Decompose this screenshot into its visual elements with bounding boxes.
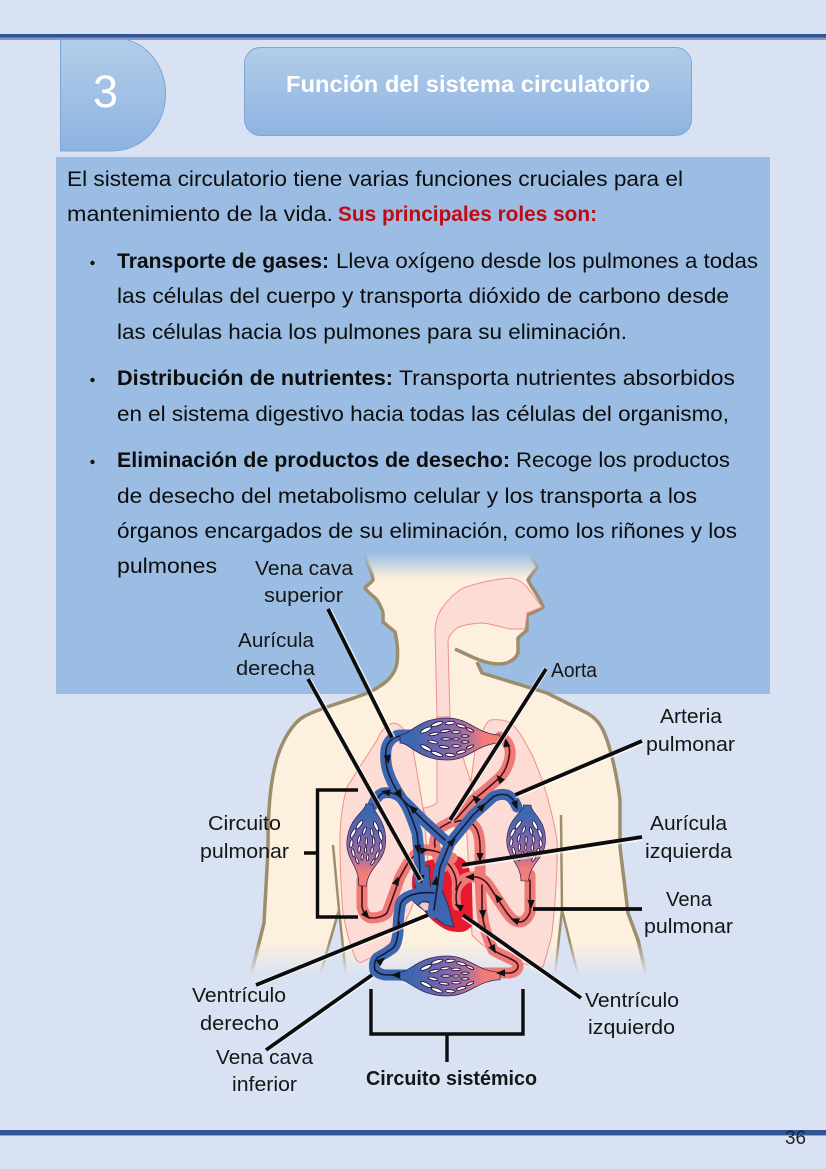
bullet: distribución de nutrientes: en el sistema digestivo hacia todas las células del organismo, bbox=[117, 402, 729, 426]
label: aurícula izquierda bbox=[645, 812, 733, 863]
bullet: eliminación de productos de desecho: Eliminación de productos de desecho: bbox=[117, 448, 510, 472]
leader lines halo bbox=[256, 610, 642, 1050]
title: Función del sistema circulatorio bbox=[286, 71, 650, 97]
label: aorta: Aorta bbox=[551, 659, 598, 682]
body silhouette bbox=[251, 553, 646, 975]
label: vena pulmonar: pulmonar bbox=[644, 915, 733, 938]
airway bbox=[435, 578, 542, 717]
bullet: transporte de gases: las células hacia los pulmones para su eliminación. bbox=[117, 320, 627, 344]
bullet: transporte de gases: Transporte de gases: bbox=[117, 249, 329, 273]
bracket: circuito sistémico bbox=[371, 989, 523, 1062]
label: circuito pulmonar bbox=[200, 812, 289, 863]
pulmonary and systemic vessels: blue bbox=[373, 735, 517, 975]
page number: 36 bbox=[785, 1128, 806, 1149]
label: arteria pulmonar: Arteria bbox=[660, 705, 723, 728]
intro text bbox=[67, 167, 683, 226]
bullet: eliminación de productos de desecho: pulmones bbox=[117, 554, 217, 578]
label: ventrículo derecho: derecho bbox=[200, 1012, 279, 1035]
bullet: transporte de gases: Lleva oxígeno desde los pulmones a todas bbox=[336, 249, 758, 273]
top rule bbox=[0, 34, 826, 40]
bullet: eliminación de productos de desecho: órganos encargados de su eliminación, como los riñones y los bbox=[117, 519, 737, 543]
label: vena cava inferior bbox=[216, 1046, 314, 1096]
label: aurícula derecha: Aurícula bbox=[238, 629, 315, 652]
heart chambers: blue bbox=[410, 866, 454, 927]
label: aurícula derecha bbox=[236, 629, 316, 680]
panel: text background bbox=[56, 157, 770, 694]
label: vena pulmonar bbox=[644, 888, 733, 938]
bullet: eliminación de productos de desecho: Recoge los productos bbox=[516, 448, 730, 472]
label: ventrículo izquierdo: Ventrículo bbox=[585, 989, 679, 1012]
label: aurícula derecha: derecha bbox=[236, 657, 316, 680]
label: circuito pulmonar: pulmonar bbox=[200, 840, 289, 863]
bottom rule bbox=[0, 1130, 826, 1136]
leader lines bbox=[256, 609, 642, 1050]
bullet: transporte de gases bbox=[90, 249, 758, 344]
label: circuito sistémico: Circuito sistémico bbox=[366, 1068, 537, 1090]
bullet: distribución de nutrientes: Transporta nutrientes absorbidos bbox=[399, 366, 735, 390]
bullet: eliminación de productos de desecho bbox=[90, 448, 737, 578]
intro text: El sistema circulatorio tiene varias funciones cruciales para el bbox=[67, 167, 683, 191]
intro text: Sus principales roles son: bbox=[338, 202, 597, 226]
bullet: eliminación de productos de desecho: de desecho del metabolismo celular y los transporta a los bbox=[117, 484, 697, 508]
label: arteria pulmonar bbox=[646, 705, 735, 756]
label: vena cava inferior: Vena cava bbox=[216, 1046, 314, 1069]
label: ventrículo derecho: Ventrículo bbox=[192, 984, 286, 1007]
label: vena pulmonar: Vena bbox=[666, 888, 713, 911]
pulmonary and systemic vessels: red bbox=[362, 737, 530, 973]
bracket: circuito pulmonar bbox=[304, 790, 358, 917]
label: ventrículo derecho bbox=[192, 984, 286, 1035]
label: arteria pulmonar: pulmonar bbox=[646, 733, 735, 756]
label: vena cava inferior: inferior bbox=[232, 1073, 297, 1096]
label: aurícula izquierda: izquierda bbox=[645, 840, 733, 863]
bullet: distribución de nutrientes bbox=[90, 366, 735, 426]
circulatory diagram bbox=[192, 553, 735, 1096]
title bbox=[244, 48, 692, 136]
label: ventrículo izquierdo bbox=[585, 989, 679, 1039]
section number badge: 3 bbox=[93, 66, 118, 117]
flow arrows bbox=[361, 737, 535, 979]
label: vena cava superior: Vena cava bbox=[255, 557, 354, 580]
label: vena cava superior bbox=[255, 557, 354, 607]
intro text: mantenimiento de la vida. bbox=[67, 202, 333, 226]
label: circuito pulmonar: Circuito bbox=[208, 812, 281, 835]
lungs bbox=[340, 717, 557, 967]
label: ventrículo izquierdo: izquierdo bbox=[588, 1016, 675, 1039]
capillary beds bbox=[343, 718, 547, 996]
bullet: distribución de nutrientes: Distribución de nutrientes: bbox=[117, 366, 393, 390]
heart bbox=[412, 855, 473, 932]
bullet: transporte de gases: las células del cuerpo y transporta dióxido de carbono desde bbox=[117, 284, 729, 308]
section number badge bbox=[60, 40, 166, 151]
label: aurícula izquierda: Aurícula bbox=[650, 812, 728, 835]
label: vena cava superior: superior bbox=[264, 584, 343, 607]
